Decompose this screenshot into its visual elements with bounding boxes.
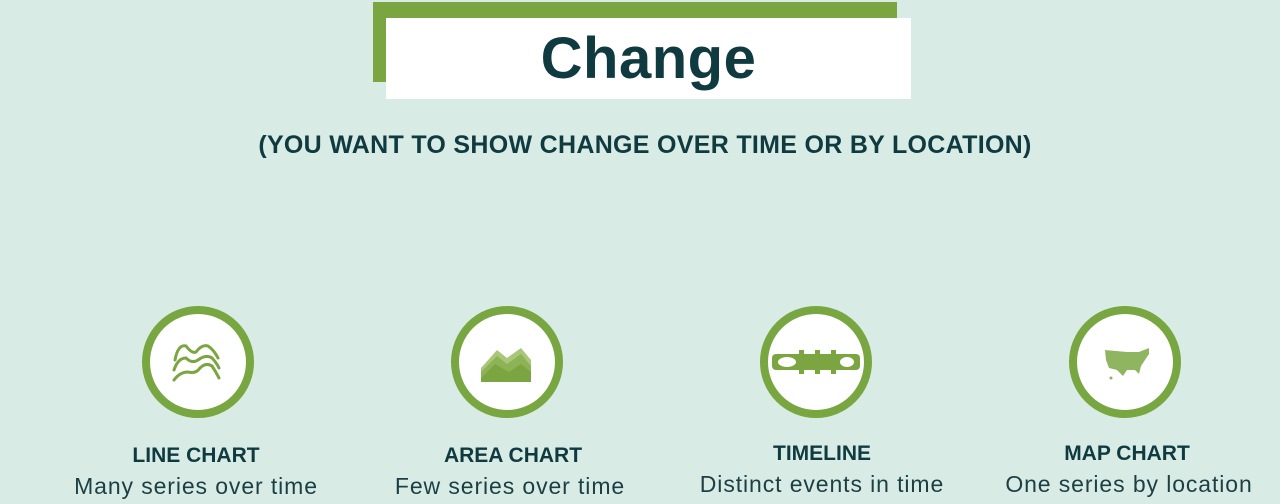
item: map chart (1005, 306, 1253, 497)
green accent bar (373, 2, 897, 82)
icon: timeline (760, 306, 872, 418)
description: One series by location (1005, 471, 1253, 497)
icon: line chart (142, 306, 254, 418)
label: LINE CHART (132, 444, 260, 467)
subtitle: (YOU WANT TO SHOW CHANGE OVER TIME OR BY LOCATION) (258, 131, 1032, 159)
description: Distinct events in time (700, 471, 944, 497)
label: AREA CHART (444, 444, 582, 467)
label: TIMELINE (773, 442, 871, 465)
icon: US map (1069, 306, 1181, 418)
title box (386, 18, 911, 99)
item: timeline (700, 306, 944, 497)
title block (373, 2, 911, 99)
title box: Change (541, 26, 756, 91)
description: Many series over time (74, 473, 318, 499)
icon: area chart (451, 306, 563, 418)
description: Few series over time (395, 473, 625, 499)
item: area chart (395, 306, 625, 499)
label: MAP CHART (1064, 442, 1190, 465)
item: line chart (74, 306, 318, 499)
